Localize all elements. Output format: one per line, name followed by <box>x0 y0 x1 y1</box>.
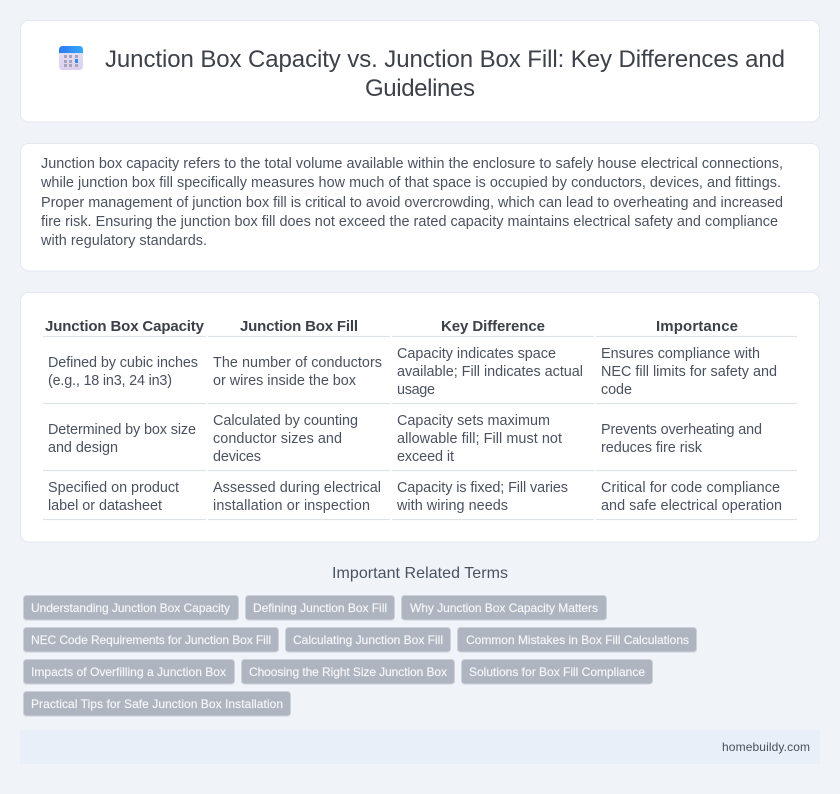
tag row 1: Understanding Junction Box Capacity <box>31 601 230 615</box>
tag row 3: Solutions for Box Fill Compliance <box>469 665 645 679</box>
tag row 2: Calculating Junction Box Fill <box>293 633 443 647</box>
table row 3 <box>48 480 782 514</box>
title <box>105 46 785 102</box>
table row 3: Critical for code compliance <box>601 480 780 496</box>
table row 2: Prevents overheating and <box>601 422 762 438</box>
table row 1: or wires inside the box <box>213 373 357 389</box>
panel: introduction text <box>20 144 820 271</box>
table row 1: available; Fill indicates actual <box>397 364 583 380</box>
footer bar <box>20 730 820 764</box>
table row 1: Capacity indicates space <box>397 346 556 362</box>
table row 3: with wiring needs <box>396 498 508 514</box>
table row 1: Ensures compliance with <box>601 346 760 362</box>
footer bar: homebuildy.com <box>722 740 810 754</box>
panel: header <box>20 20 820 122</box>
panel: comparison table <box>20 292 820 542</box>
table row 1: Defined by cubic inches <box>48 355 198 371</box>
table row 3: Specified on product <box>48 480 179 496</box>
table header row: Junction Box Capacity <box>45 318 205 335</box>
tag row 4: Practical Tips for Safe Junction Box Installation <box>31 697 283 711</box>
tag row 1: Why Junction Box Capacity Matters <box>410 601 598 615</box>
title: Junction Box Capacity vs. Junction Box Fill: Key Differences and <box>105 46 785 73</box>
table row 2 <box>48 413 762 465</box>
table row 3: Assessed during electrical <box>213 480 381 496</box>
table row 1: (e.g., 18 in3, 24 in3) <box>48 373 172 389</box>
table row 1: The number of conductors <box>213 355 382 371</box>
table row 2: Calculated by counting <box>213 413 358 429</box>
tag row 2: NEC Code Requirements for Junction Box Fill <box>31 633 271 647</box>
table row 2: devices <box>213 449 261 465</box>
table row 2: Capacity sets maximum <box>397 413 550 429</box>
tag row 1 <box>24 596 606 620</box>
intro paragraph: Proper management of junction box fill is critical to avoid overcrowding, which can lead to overheating and increased <box>41 195 783 211</box>
table row 1: NEC fill limits for safety and <box>601 364 777 380</box>
table row 3: Capacity is fixed; Fill varies <box>397 480 568 496</box>
intro paragraph: while junction box fill specifically measures how much of that space is occupied by conductors, devices, and fittings. <box>40 175 781 191</box>
intro paragraph: fire risk. Ensuring the junction box fill does not exceed the rated capacity maintains electrical safety and compliance <box>41 214 778 230</box>
tag row 3: Choosing the Right Size Junction Box <box>249 665 447 679</box>
heading: related terms: Important Related Terms <box>332 565 508 582</box>
intro paragraph: Junction box capacity refers to the total volume available within the enclosure to safely house electrical connections, <box>41 156 783 172</box>
tag row 2 <box>24 628 696 652</box>
table header row: Junction Box Fill <box>240 318 358 335</box>
table row 3: installation or inspection <box>213 498 370 514</box>
table header row <box>45 318 738 335</box>
related term tags <box>24 596 696 716</box>
table header row: Key Difference <box>441 318 545 335</box>
table row 2: reduces fire risk <box>601 440 703 456</box>
tag row 4 <box>24 692 290 716</box>
icon: calendar <box>59 46 83 70</box>
table row 3: label or datasheet <box>48 498 162 514</box>
table row 1 <box>48 346 777 398</box>
table row 2: and design <box>48 440 118 456</box>
table header row: Importance <box>656 318 738 335</box>
title: Guidelines <box>365 75 475 102</box>
tag row 3: Impacts of Overfilling a Junction Box <box>31 665 226 679</box>
table row 2: exceed it <box>397 449 454 465</box>
table row 2: allowable fill; Fill must not <box>397 431 562 447</box>
table row 3: and safe electrical operation <box>601 498 782 514</box>
table row 1: usage <box>397 382 435 398</box>
table row 2: conductor sizes and <box>213 431 342 447</box>
table row 1: code <box>601 382 632 398</box>
table row 2: Determined by box size <box>48 422 196 438</box>
tag row 2: Common Mistakes in Box Fill Calculations <box>466 633 689 647</box>
tag row 1: Defining Junction Box Fill <box>253 601 387 615</box>
intro paragraph: with regulatory standards. <box>40 233 207 249</box>
tag row 3 <box>24 660 652 684</box>
intro paragraph <box>40 156 783 249</box>
